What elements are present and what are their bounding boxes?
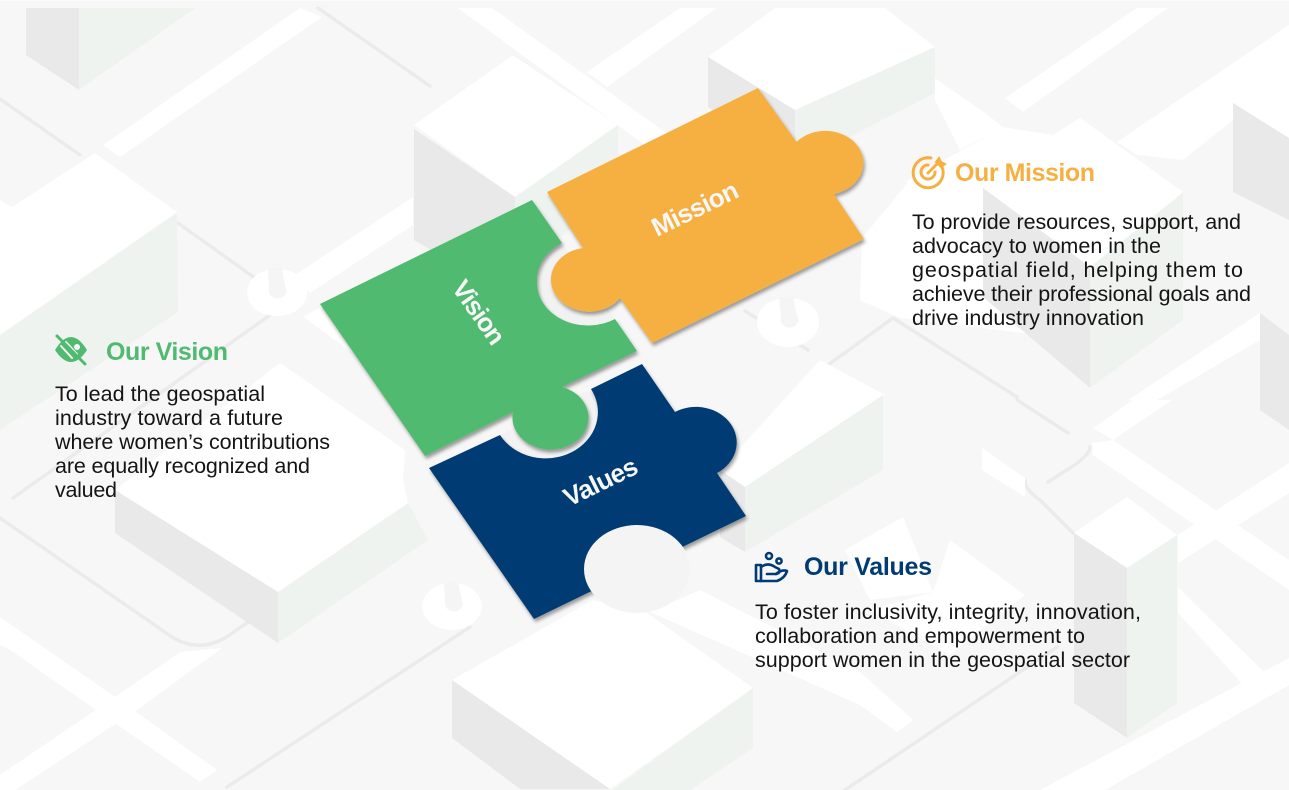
text: vision body: industry toward a future — [55, 406, 283, 430]
heading: our mission: Our Mission — [955, 159, 1095, 187]
heading: our values: Our Values — [804, 553, 932, 581]
panel: our vision — [54, 336, 330, 502]
text: mission body: drive industry innovation — [912, 306, 1144, 330]
panel: our mission — [912, 158, 1251, 330]
icon: crossed-out eye — [55, 336, 87, 364]
text: mission body — [912, 210, 1251, 330]
cut-out: Values hole — [584, 525, 690, 613]
panel: puzzle graphic — [320, 88, 864, 619]
panel: our values — [755, 553, 1141, 672]
piece label: Values: Values — [558, 451, 643, 512]
text: values body — [755, 600, 1141, 672]
text: values body: support women in the geospatial sector — [755, 648, 1130, 672]
text: mission body: To provide resources, support, and — [912, 210, 1241, 234]
text: values body: collaboration and empowerment to — [755, 624, 1085, 648]
notch ring behind Vision tab — [500, 389, 598, 458]
text: mission body: advocacy to women in the — [912, 234, 1161, 258]
notch ring behind Mission tab — [537, 243, 615, 326]
text: values body: To foster inclusivity, integrity, innovation, — [755, 600, 1141, 624]
icon: hand holding drops — [756, 553, 787, 581]
piece label: Vision: Vision — [446, 274, 512, 350]
puzzle piece: Mission — [547, 88, 864, 343]
puzzle piece: Vision — [320, 200, 637, 456]
puzzle piece: Values — [429, 364, 746, 619]
icon: target with arrow — [913, 158, 945, 188]
text: vision body: To lead the geospatial — [55, 382, 265, 406]
text: vision body: are equally recognized and — [55, 454, 310, 478]
text: vision body: where women’s contributions — [54, 430, 330, 454]
text: mission body: geospatial field, helping them to — [912, 258, 1243, 282]
text: vision body — [54, 382, 330, 502]
piece label: Mission: Mission — [646, 175, 743, 242]
heading: our vision: Our Vision — [106, 338, 228, 366]
text: mission body: achieve their professional goals and — [912, 282, 1251, 306]
text: vision body: valued — [55, 478, 117, 502]
